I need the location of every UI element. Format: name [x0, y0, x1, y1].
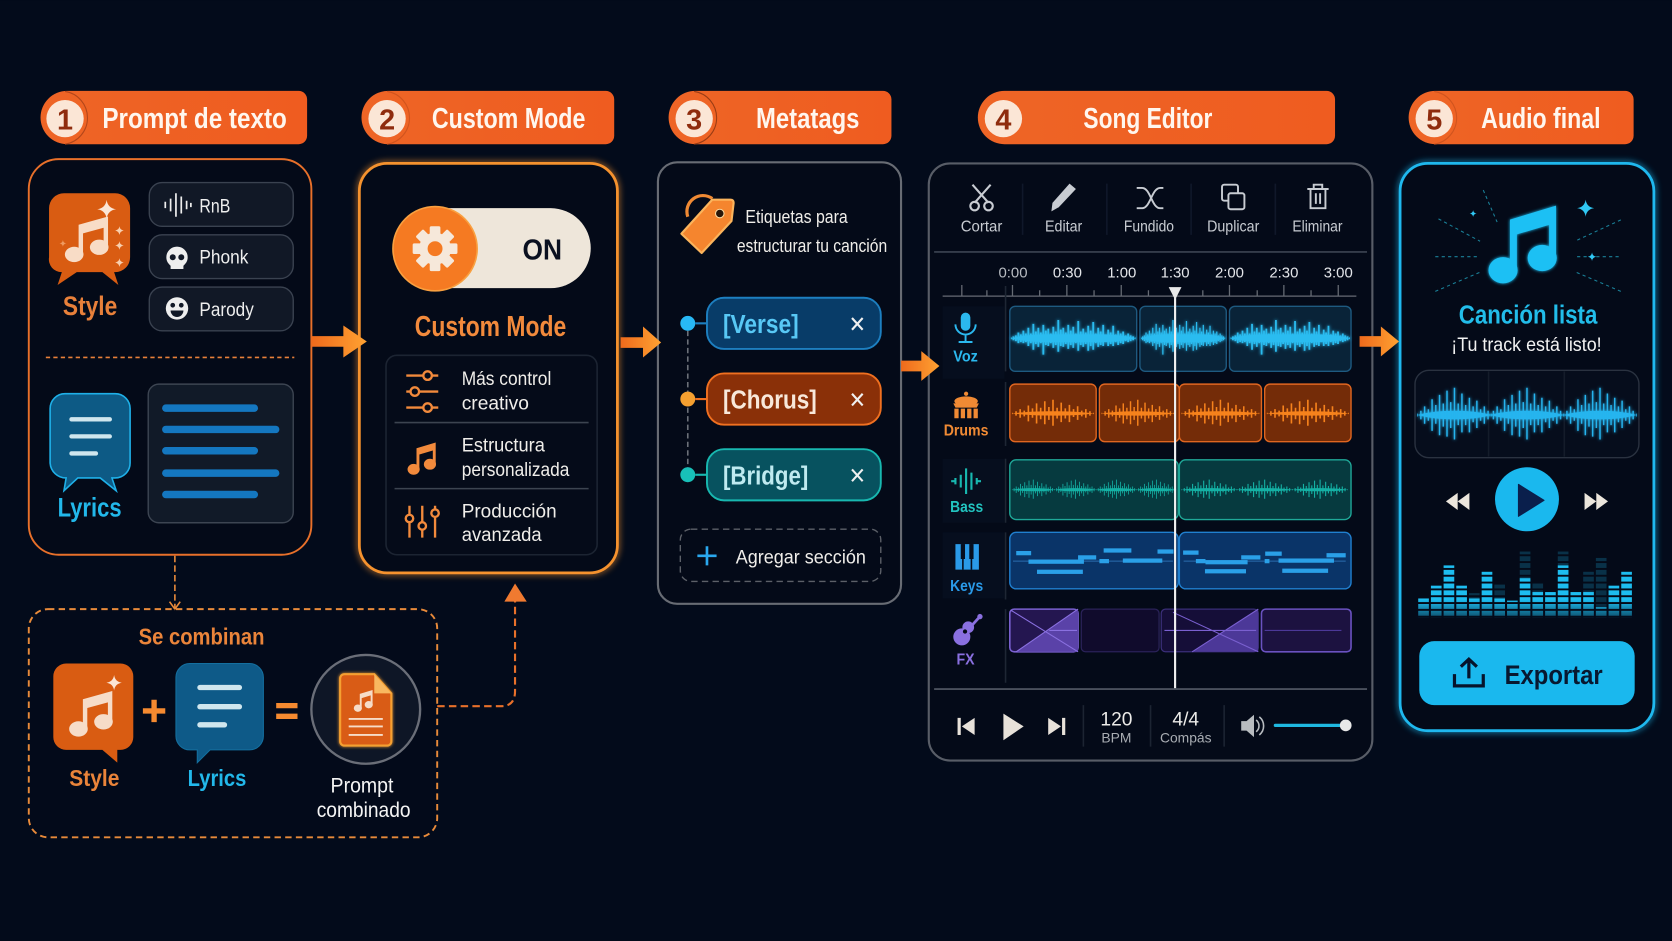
playback controls [1446, 467, 1608, 531]
icon: combined prompt document [311, 655, 420, 764]
panel 1: prompt de texto [29, 159, 311, 555]
tool: Editar: Editar [1045, 219, 1083, 236]
label: Prompt combinado [317, 774, 411, 822]
button: Agregar sección [680, 529, 881, 581]
icon: lyrics [176, 664, 263, 763]
track: Drums [944, 384, 1351, 442]
tool: Editar [1045, 184, 1083, 236]
header 4: Song Editor [978, 91, 1335, 144]
toggle: ON [393, 207, 591, 291]
connector: panel 1 to combine box [170, 556, 180, 609]
feature: Producción avanzada: avanzada [462, 525, 542, 546]
label: Prompt combinado: combinado [317, 798, 411, 822]
label: Style: Style [63, 291, 117, 321]
icon: lyrics bubble [50, 394, 130, 491]
text: etiquetas: estructurar tu canción [737, 236, 887, 256]
feature: Más control creativo: Más control [462, 369, 551, 390]
header 2: Custom Mode [361, 91, 614, 144]
header 2: Custom Mode: Custom Mode [432, 103, 585, 135]
header 1: Prompt de texto: 1 [57, 104, 73, 136]
toggle: ON: ON [523, 234, 562, 266]
timeline ruler: 2:30 [1269, 264, 1298, 281]
connector: combine box to panel 2 [437, 584, 527, 706]
header 4: Song Editor: 4 [995, 104, 1011, 136]
tag: Verse: [Verse] [723, 311, 799, 339]
header 4: Song Editor: Song Editor [1083, 103, 1212, 135]
final waveform [1415, 370, 1639, 458]
toolbar [961, 184, 1343, 236]
feature list [386, 355, 597, 555]
tool: Duplicar [1207, 185, 1260, 236]
heading: Canción lista: Canción lista [1459, 301, 1598, 329]
header 5: Audio final: 5 [1426, 104, 1442, 136]
tool: Eliminar [1292, 185, 1343, 236]
feature: Producción avanzada: Producción [462, 501, 557, 522]
feature: Producción avanzada [406, 501, 557, 546]
track: FX: FX [956, 652, 975, 669]
text: etiquetas [737, 207, 887, 256]
transport controls: Compás [1160, 729, 1212, 745]
feature: Estructura personalizada [408, 435, 570, 481]
pill: Parody [149, 287, 293, 331]
header 1: Prompt de texto [41, 91, 307, 144]
tool: Cortar: Cortar [961, 219, 1003, 236]
icon: equals [276, 703, 298, 719]
icon: style [53, 664, 133, 763]
tag: Verse [680, 298, 881, 349]
button: Agregar sección: Agregar sección [736, 547, 866, 568]
pill: Parody: Parody [199, 300, 254, 321]
feature: Más control creativo: creativo [462, 394, 529, 415]
timeline ruler: 1:30 [1161, 264, 1190, 281]
icon: style bubble [49, 193, 130, 285]
track: FX [953, 609, 1351, 669]
transport controls: 120 [1100, 709, 1132, 730]
track: Keys: Keys [950, 578, 983, 595]
icon: music note with rays [1435, 190, 1621, 291]
icon: tag [681, 196, 734, 253]
panel 3: metatags [658, 162, 901, 604]
feature: Estructura personalizada: personalizada [462, 460, 570, 481]
tag: Chorus: [Chorus] [723, 387, 817, 415]
track: Voz: Voz [953, 349, 978, 366]
timeline ruler: 0:00 [999, 264, 1028, 281]
tool: Eliminar: Eliminar [1292, 219, 1343, 236]
arrow: 4 to 5 [1360, 327, 1399, 356]
tag: Chorus [680, 373, 881, 425]
panel: se combinan [29, 609, 437, 837]
pill: Phonk [149, 235, 293, 279]
playhead [1169, 287, 1181, 689]
timeline ruler: 0:30 [1053, 264, 1082, 281]
arrow: 3 to 4 [901, 351, 939, 381]
tool: Fundido: Fundido [1124, 219, 1174, 236]
panel 4: song editor [929, 163, 1372, 761]
timeline ruler [943, 264, 1356, 683]
tool: Fundido [1124, 188, 1174, 236]
transport controls: 4/4 [1172, 709, 1199, 730]
heading: Se combinan: Se combinan [139, 623, 264, 649]
arrow: 1 to 2 [311, 325, 367, 357]
tag: Bridge [680, 449, 881, 500]
track: Keys [943, 532, 1351, 598]
pill: RnB [149, 183, 293, 226]
header 5: Audio final: Audio final [1481, 103, 1601, 135]
header 3: Metatags: 3 [686, 104, 702, 136]
icon: plus [143, 700, 165, 722]
feature: Estructura personalizada: Estructura [462, 435, 545, 456]
transport controls [958, 705, 1352, 747]
label: Lyrics: Lyrics [188, 765, 246, 791]
timeline ruler: 3:00 [1324, 264, 1353, 281]
timeline ruler: 1:00 [1107, 264, 1136, 281]
label: Prompt combinado: Prompt [331, 774, 394, 798]
text: etiquetas: Etiquetas para [745, 207, 849, 227]
label: Lyrics: Lyrics [58, 492, 122, 522]
tag: Bridge: [Bridge] [723, 462, 808, 490]
heading: Custom Mode: Custom Mode [415, 311, 566, 343]
equalizer [1416, 552, 1635, 619]
header 3: Metatags: Metatags [756, 103, 859, 135]
lyrics text box [148, 384, 293, 523]
panel 2: custom mode [359, 163, 617, 573]
feature: Más control creativo [406, 369, 551, 415]
transport controls: BPM [1101, 729, 1131, 745]
button: Exportar: Exportar [1505, 660, 1603, 690]
arrow: 2 to 3 [621, 327, 661, 357]
track: Drums: Drums [944, 422, 989, 439]
header 2: Custom Mode: 2 [379, 104, 395, 136]
panel 5: audio final [1400, 163, 1654, 731]
header 1: Prompt de texto: Prompt de texto [102, 103, 287, 135]
label: Style: Style [69, 765, 119, 791]
track: Bass [943, 459, 1351, 523]
pill: Phonk: Phonk [199, 248, 249, 269]
subheading: ¡Tu track está listo! [1451, 335, 1602, 356]
pill: RnB: RnB [199, 196, 230, 217]
header 5: Audio final [1409, 91, 1634, 144]
timeline ruler: 2:00 [1215, 264, 1244, 281]
header 3: Metatags [669, 91, 891, 144]
tool: Duplicar: Duplicar [1207, 219, 1260, 236]
track: Voz [943, 306, 1351, 379]
button: Exportar [1419, 641, 1635, 705]
track: Bass: Bass [950, 499, 983, 516]
tool: Cortar [961, 185, 1003, 236]
